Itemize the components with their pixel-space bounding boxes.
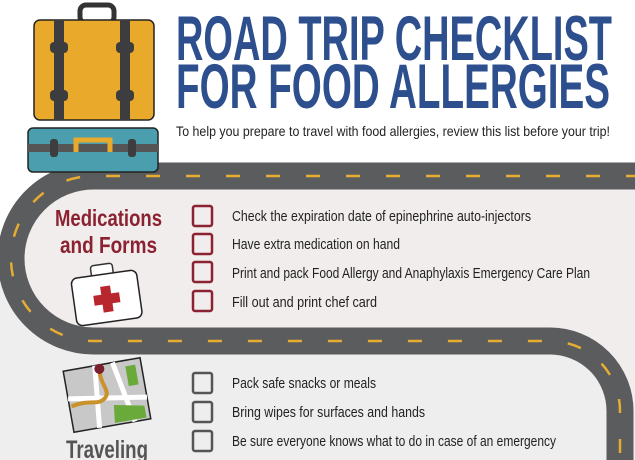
checklist: traveling: Be sure everyone knows what to do in case of an emergency <box>232 433 556 450</box>
checklist: medications <box>193 206 590 311</box>
icon: first aid kit <box>69 260 143 326</box>
checklist: traveling: Pack safe snacks or meals <box>232 375 376 392</box>
road <box>11 176 635 460</box>
checklist: medications: Have extra medication on hand <box>232 236 400 253</box>
icon: suitcases <box>28 5 158 172</box>
panel: medications area <box>11 176 635 411</box>
checklist: traveling <box>193 373 556 451</box>
checklist: medications: Check the expiration date of epinephrine auto-injectors <box>232 208 531 225</box>
heading: medications and forms: Medications <box>55 205 162 231</box>
heading: medications and forms: and Forms <box>60 232 157 258</box>
background lower <box>0 258 635 460</box>
checklist: medications: Fill out and print chef card <box>232 294 377 311</box>
heading: medications and forms <box>55 205 162 258</box>
icon: map <box>63 357 151 432</box>
checklist: traveling: Bring wipes for surfaces and hands <box>232 404 425 421</box>
title <box>176 4 612 122</box>
